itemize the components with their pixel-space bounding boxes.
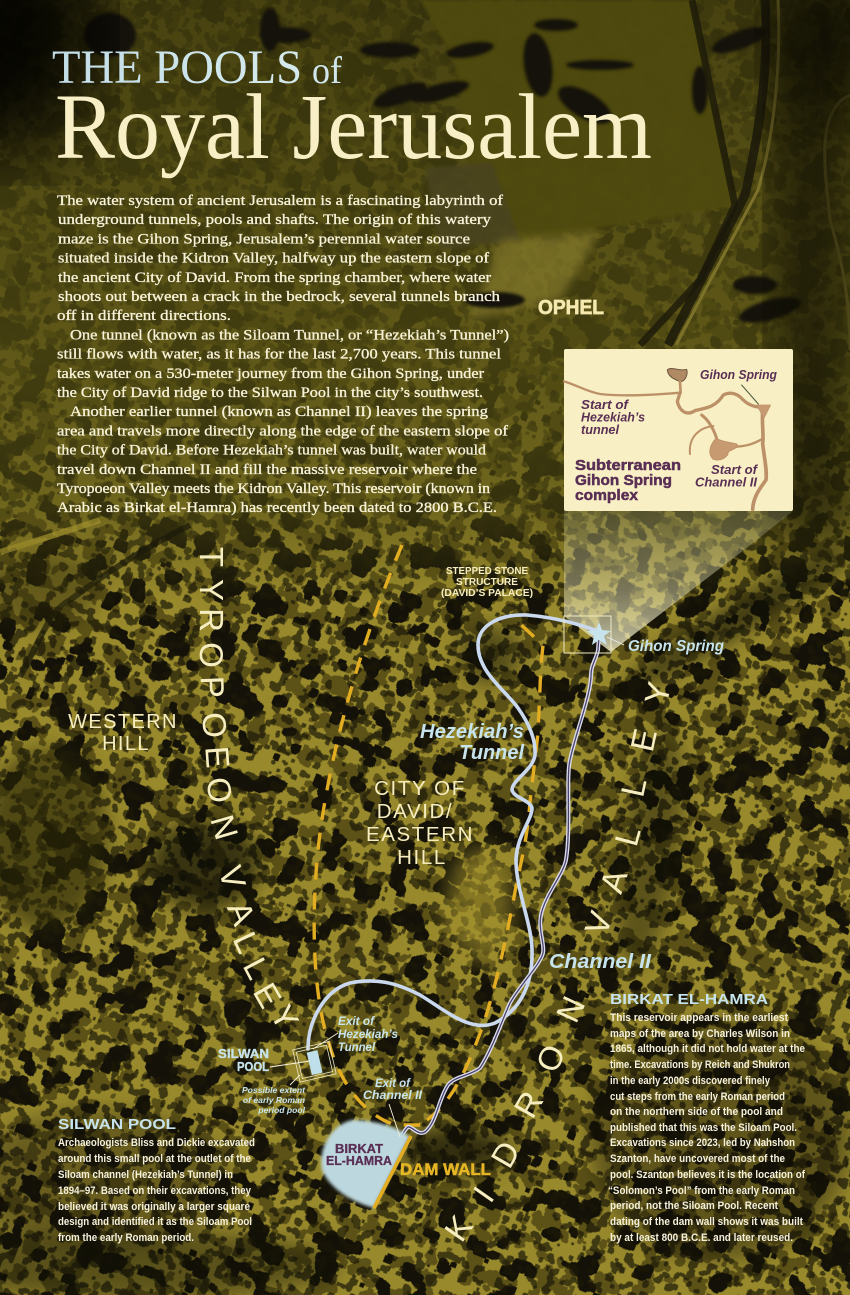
text block: Birkat el-Hamra: in the early 2000s discovered finely <box>610 1075 770 1087</box>
label: Hezekiah's Tunnel: Hezekiah’s <box>420 721 524 743</box>
valley label: Tyropoeon Valley: Y <box>193 579 230 601</box>
reservoir: Birkat el-Hamra: EL-HAMRA <box>326 1154 392 1168</box>
zoom cone from map to inset <box>564 511 793 652</box>
valley label: Tyropoeon Valley: R <box>193 608 230 632</box>
upper photo toning <box>0 0 850 600</box>
label: Gihon Spring: Gihon Spring <box>628 638 725 655</box>
valley label: Kidron Valley: A <box>592 865 634 897</box>
label: City of David / Eastern Hill: CITY OF <box>374 777 466 800</box>
valley label: Tyropoeon Valley: L <box>226 926 267 958</box>
valley label: Kidron Valley <box>437 678 678 1248</box>
valley label: Tyropoeon Valley: A <box>220 896 263 930</box>
panel: inset map of Gihon Spring complex: Hezekiah’s <box>581 410 645 424</box>
intro text block: maze is the Gihon Spring, Jerusalem’s perennial water source <box>58 231 470 247</box>
valley label: Kidron Valley: L <box>607 822 648 850</box>
intro text block: The water system of ancient Jerusalem is a fascinating labyrinth of <box>57 193 503 209</box>
text block: Silwan Pool: from the early Roman period. <box>58 1232 194 1244</box>
title: Royal Jerusalem <box>55 76 652 179</box>
label: Exit of Channel II: Exit of <box>375 1076 412 1090</box>
intro text block <box>57 193 509 516</box>
intro text block: Arabic as Birkat el-Hamra) has recently been dated to 2800 B.C.E. <box>57 500 497 516</box>
label: possible extent of pool: Possible extent <box>242 1085 306 1095</box>
valley label: Kidron Valley: E <box>623 725 664 755</box>
label: Western Hill: HILL <box>102 733 150 755</box>
valley label: Kidron Valley: R <box>506 1085 550 1124</box>
Silwan Pool marker <box>218 1033 338 1085</box>
label: possible extent of pool: period pool <box>257 1105 306 1115</box>
building-zone large shadows and clearings <box>0 539 850 1295</box>
panel: inset map of Gihon Spring complex: tunnel <box>581 423 620 437</box>
label: possible extent of pool <box>242 1085 306 1115</box>
panel: inset map of Gihon Spring complex: Subterranean <box>575 457 681 474</box>
dam wall <box>374 1136 491 1208</box>
intro text block: Another earlier tunnel (known as Channel II) leaves the spring <box>70 404 489 420</box>
valley label: Kidron Valley: N <box>549 991 592 1028</box>
intro text block: area and travels more directly along the edge of the eastern slope of <box>57 423 508 439</box>
Silwan Pool marker: SILWAN <box>218 1047 269 1061</box>
text block: Birkat el-Hamra: dating of the dam wall shows it was built <box>610 1216 803 1228</box>
panel: inset map of Gihon Spring complex: complex <box>575 487 639 504</box>
label: Exit of Hezekiah's Tunnel: Hezekiah’s <box>338 1027 398 1041</box>
valley label: Tyropoeon Valley: L <box>236 951 277 985</box>
intro text block: shoots out between a crack in the bedrock, several tunnels branch <box>58 289 501 305</box>
valley label: Tyropoeon Valley: O <box>193 642 230 668</box>
text block: Birkat el-Hamra: cut steps from the early Roman period <box>610 1091 785 1103</box>
intro text block: the City of David. Before Hezekiah’s tunnel was built, water would <box>57 443 487 459</box>
label: City of David / Eastern Hill: HILL <box>397 846 447 869</box>
valley label: Tyropoeon Valley: T <box>193 547 230 567</box>
label: Exit of Channel II: Channel II <box>363 1088 423 1102</box>
label: Hezekiah's Tunnel <box>420 721 524 764</box>
text block: Birkat el-Hamra: Szanton, have uncovered most of the <box>610 1153 785 1165</box>
label: stepped stone structure: STRUCTURE <box>456 577 518 588</box>
valley label: Tyropoeon Valley: P <box>194 675 231 699</box>
label: stepped stone structure: (DAVID’S PALACE) <box>441 588 533 599</box>
valley label: Tyropoeon Valley: O <box>195 711 234 739</box>
panel: inset map of Gihon Spring complex: Start of <box>711 463 759 477</box>
valley label: Kidron Valley: V <box>577 906 620 940</box>
label: possible extent of pool: of early Roman <box>243 1095 305 1105</box>
valley label: Kidron Valley: K <box>437 1209 480 1248</box>
dam wall: DAM WALL <box>400 1160 491 1179</box>
label: City of David / Eastern Hill: EASTERN <box>366 823 474 846</box>
inset tunnel plan <box>564 369 771 509</box>
text block: Birkat el-Hamra <box>608 991 805 1244</box>
text block: Birkat el-Hamra: BIRKAT EL-HAMRA <box>610 991 768 1008</box>
top tree shadows <box>84 8 803 328</box>
text block: Silwan Pool: design and identified it as the Siloam Pool <box>58 1216 252 1228</box>
text block: Birkat el-Hamra: 1865, although it did not hold water at the <box>610 1043 805 1055</box>
valley label: Tyropoeon Valley: O <box>200 775 239 805</box>
reservoir: Birkat el-Hamra: BIRKAT <box>335 1142 383 1156</box>
text block: Birkat el-Hamra: Excavations since 2023, led by Nahshon <box>610 1137 795 1149</box>
title: of <box>312 50 342 92</box>
valley label: Kidron Valley: O <box>528 1039 573 1078</box>
title: THE POOLS <box>52 41 302 94</box>
intro text block: off in different directions. <box>57 308 231 324</box>
text block: Birkat el-Hamra: “Solomon’s Pool” from the early Roman <box>608 1185 795 1197</box>
intro text block: Tyropoeon Valley meets the Kidron Valley. This reservoir (known in <box>57 481 491 497</box>
text block: Birkat el-Hamra: pool. Szanton believes it is the location of <box>610 1169 805 1181</box>
text block: Birkat el-Hamra: time. Excavations by Reich and Shukron <box>610 1059 790 1071</box>
panel: inset map of Gihon Spring complex <box>564 349 793 511</box>
label: Exit of Hezekiah's Tunnel <box>338 1014 398 1054</box>
label: Western Hill: WESTERN <box>68 711 178 733</box>
label: City of David / Eastern Hill <box>366 777 474 869</box>
intro text block: still flows with water, as it has for the last 2,700 years. This tunnel <box>57 347 501 363</box>
Silwan Pool marker: POOL <box>237 1060 269 1074</box>
label: Ophel: OPHEL <box>538 297 604 319</box>
text block: Birkat el-Hamra: This reservoir appears in the earliest <box>610 1012 788 1024</box>
panel: inset map of Gihon Spring complex: Channel II <box>695 476 758 490</box>
label: Exit of Hezekiah's Tunnel: Exit of <box>338 1014 376 1028</box>
valley label: Kidron Valley: D <box>483 1135 527 1174</box>
intro text block: takes water on a 530-meter journey from the Gihon Spring, under <box>57 366 484 382</box>
text block: Birkat el-Hamra: published that this was the Siloam Pool. <box>610 1122 797 1134</box>
text block: Silwan Pool: believed it was originally a larger square <box>58 1201 250 1213</box>
intro text block: the ancient City of David. From the spring chamber, where water <box>58 270 491 286</box>
intro text block: travel down Channel II and fill the massive reservoir where the <box>57 462 477 478</box>
text block: Silwan Pool <box>58 1116 255 1244</box>
text block: Silwan Pool: 1894–97. Based on their excavations, they <box>58 1185 251 1197</box>
temple platform <box>420 0 735 240</box>
text block: Silwan Pool: Siloam channel (Hezekiah’s Tunnel) in <box>58 1169 233 1181</box>
valley label: Kidron Valley: L <box>613 774 653 800</box>
text block: Silwan Pool: around this small pool at the outlet of the <box>58 1153 251 1165</box>
panel: inset map of Gihon Spring complex: Start of <box>581 398 630 412</box>
intro text block: underground tunnels, pools and shafts. The origin of this watery <box>58 212 492 228</box>
valley label: Tyropoeon Valley: Y <box>263 998 306 1036</box>
text block: Silwan Pool: SILWAN POOL <box>58 1116 176 1133</box>
text block: Birkat el-Hamra: by at least 800 B.C.E. and later reused. <box>610 1232 793 1244</box>
label: stepped stone structure <box>441 566 533 599</box>
label: Exit of Hezekiah's Tunnel: Tunnel <box>338 1040 376 1054</box>
valley label: Tyropoeon Valley: E <box>246 976 289 1014</box>
valley label: Kidron Valley: Y <box>637 678 678 708</box>
valley label: Tyropoeon Valley: V <box>212 861 253 893</box>
label: City of David / Eastern Hill: DAVID/ <box>377 800 453 823</box>
label: Hezekiah's Tunnel: Tunnel <box>459 742 524 764</box>
label: Exit of Channel II <box>363 1076 423 1137</box>
panel: inset map of Gihon Spring complex: Gihon Spring <box>575 472 672 489</box>
reservoir: Birkat el-Hamra <box>321 1120 410 1208</box>
marker: Gihon Spring box and star <box>564 616 624 653</box>
valley label: Tyropoeon Valley: N <box>203 811 246 844</box>
intro text block: One tunnel (known as the Siloam Tunnel, or “Hezekiah’s Tunnel”) <box>70 327 509 343</box>
roads and valleys near Ophel <box>0 0 850 677</box>
valley label: Kidron Valley: I <box>466 1180 501 1209</box>
label: stepped stone structure: STEPPED STONE <box>446 566 528 577</box>
valley label: Tyropoeon Valley: E <box>198 745 237 769</box>
intro text block: situated inside the Kidron Valley, halfway up the eastern slope of <box>58 251 489 267</box>
panel: inset map of Gihon Spring complex: Gihon Spring <box>700 368 777 382</box>
route: Hezekiah's Tunnel <box>308 615 598 1049</box>
text block: Birkat el-Hamra: on the northern side of the pool and <box>610 1106 783 1118</box>
intro text block: the City of David ridge to the Silwan Pool in the city’s southwest. <box>57 385 483 401</box>
route: Channel II <box>400 636 599 1138</box>
valley label: Tyropoeon Valley <box>193 547 306 1036</box>
label: Channel II: Channel II <box>549 951 651 973</box>
text block: Silwan Pool: Archaeologists Bliss and Dickie excavated <box>58 1137 255 1149</box>
text block: Birkat el-Hamra: maps of the area by Charles Wilson in <box>610 1028 790 1040</box>
city wall dashed line <box>314 545 543 1125</box>
label: Western Hill <box>68 711 178 755</box>
text block: Birkat el-Hamra: period, not the Siloam Pool. Recent <box>610 1200 778 1212</box>
